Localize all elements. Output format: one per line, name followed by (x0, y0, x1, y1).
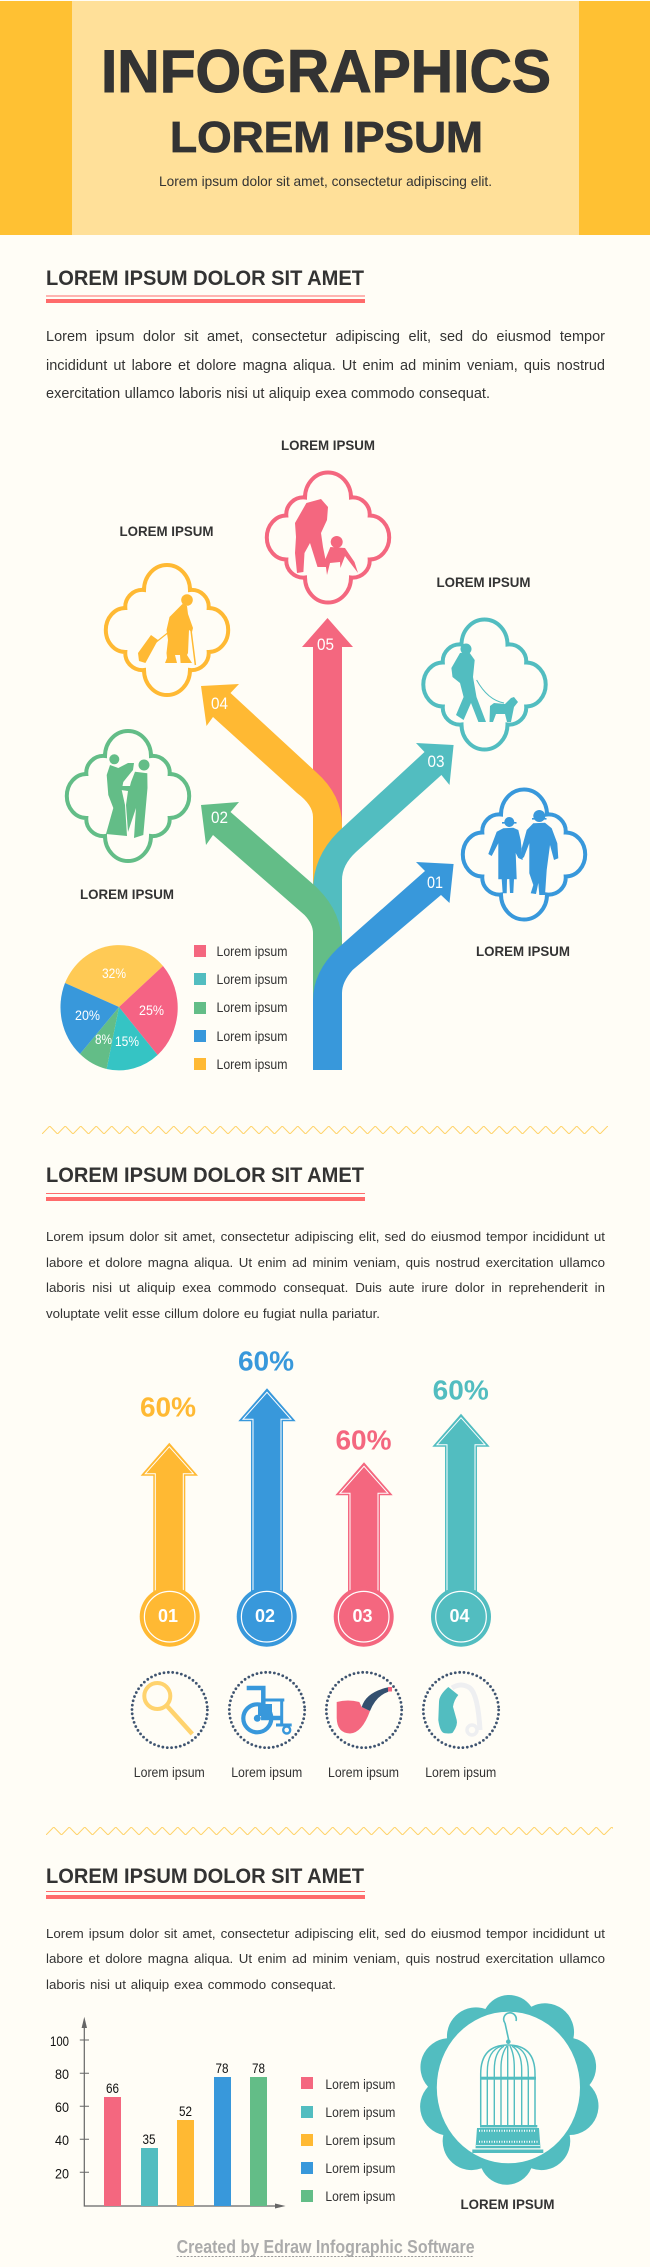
text block: section one paragraph: Lorem ipsum dolor sit amet, consectetur adipiscing elit, sed do eiusmod tempor (46, 329, 605, 345)
pie legend: Lorem ipsum (216, 944, 288, 959)
heading: section two (46, 1163, 365, 1201)
text block: section three paragraph (46, 1926, 605, 1992)
icon labels (134, 1765, 496, 1780)
arrow bar 04: 04 (449, 1606, 470, 1626)
bar chart legend: Lorem ipsum (325, 2077, 395, 2092)
panel: section three bar chart (46, 1864, 605, 2212)
arrow 03 (313, 743, 454, 950)
heading: section two: LOREM IPSUM DOLOR SIT AMET (46, 1163, 364, 1187)
arrow 01 (313, 862, 454, 1070)
icon labels: Lorem ipsum (134, 1765, 205, 1780)
arrow numbers: 01 (427, 873, 443, 892)
heading: section three: LOREM IPSUM DOLOR SIT AMET (46, 1864, 364, 1888)
icon: pink cloud with parent and child (267, 472, 389, 602)
arrow bar 01: 60% (140, 1392, 196, 1423)
pie legend: Lorem ipsum (216, 972, 288, 987)
pie legend: Lorem ipsum (216, 1000, 288, 1015)
bar chart: 20 (55, 2166, 69, 2182)
panel: header banner (0, 1, 650, 235)
bar chart: 52 (179, 2103, 192, 2119)
arrow 02 (201, 802, 342, 1010)
arrow 05 (302, 618, 353, 900)
pie chart: 20% (75, 1007, 100, 1023)
panel: section one tree infographic (46, 266, 605, 1072)
label: yellow cloud: LOREM IPSUM (120, 523, 214, 539)
text block: section three paragraph: labore et dolore magna aliqua. Ut enim ad minim veniam, quis nostrud exercitation ullamco (46, 1951, 605, 1966)
text block: section three paragraph: laboris nisi ut aliquip exea commodo consequat. (46, 1977, 336, 1992)
label: pink cloud: LOREM IPSUM (281, 437, 375, 453)
icon: teal cloud with man walking dog (423, 620, 546, 750)
icon: pipe (326, 1672, 402, 1748)
text block: section two paragraph: labore et dolore magna aliqua. Ut enim ad minim veniam, quis nostrud exercitation ullamco (46, 1255, 605, 1270)
pie chart: 8% (95, 1031, 112, 1047)
text block: section three paragraph: Lorem ipsum dolor sit amet, consectetur adipiscing elit, sed do eiusmod tempor incididunt ut (46, 1926, 605, 1941)
pie legend: Lorem ipsum (216, 1029, 288, 1044)
icon labels: Lorem ipsum (425, 1765, 496, 1780)
bar chart: 100 (50, 2033, 69, 2049)
arrow numbers: 02 (211, 808, 228, 827)
heading: section three (46, 1864, 365, 1899)
arrow bar 02 (237, 1346, 297, 1647)
bar chart (50, 2017, 286, 2208)
bar chart: 40 (55, 2132, 69, 2148)
pie chart: 15% (115, 1033, 139, 1049)
text block: section two paragraph: laboris nisi ut aliquip exea commodo consequat. Duis aute irure dolor in reprehenderit in (46, 1280, 605, 1295)
icon labels: Lorem ipsum (328, 1765, 399, 1780)
arrow bar 02: 60% (238, 1346, 294, 1377)
text block: section one paragraph: incididunt ut labore et dolore magna aliqua. Ut enim ad minim veniam, quis nostrud (46, 358, 605, 374)
icon: green cloud with couple (67, 731, 189, 861)
icon: yellow cloud with old woman (106, 565, 228, 695)
heading: section one: LOREM IPSUM DOLOR SIT AMET (46, 266, 364, 290)
label: birdcage: LOREM IPSUM (460, 2196, 554, 2212)
text block: section one paragraph (46, 329, 605, 402)
arrow bar 03: 03 (352, 1606, 373, 1626)
icon labels: Lorem ipsum (231, 1765, 302, 1780)
arrow bar 03: 60% (335, 1424, 392, 1455)
icon: magnifying glass (132, 1672, 207, 1748)
icon: scalloped frame with birdcage (420, 1995, 599, 2185)
bar chart legend: Lorem ipsum (325, 2105, 395, 2120)
bar chart legend: Lorem ipsum (325, 2189, 395, 2204)
pie chart: 25% (139, 1002, 164, 1018)
arrow numbers: 05 (317, 635, 334, 654)
arrow bar 03 (334, 1424, 394, 1647)
arrow numbers: 03 (428, 752, 444, 771)
bar chart: 80 (55, 2066, 69, 2082)
heading: section one (46, 266, 365, 303)
bar chart: 66 (106, 2080, 119, 2096)
label: teal cloud: LOREM IPSUM (436, 574, 530, 590)
icon: wheelchair (229, 1672, 305, 1748)
bar chart: 78 (252, 2060, 265, 2076)
label: blue cloud: LOREM IPSUM (476, 943, 570, 959)
text block: section two paragraph (46, 1229, 605, 1321)
icon: hearing aid (423, 1672, 499, 1748)
pie legend: Lorem ipsum (216, 1057, 288, 1072)
arrow 04 (201, 684, 342, 950)
arrow bar 01: 01 (158, 1606, 178, 1626)
bar chart: 78 (216, 2060, 229, 2076)
footer credit: Created by Edraw Infographic Software (177, 2237, 475, 2257)
bar chart: 60 (55, 2099, 69, 2115)
icon: blue cloud with elderly couple (463, 790, 585, 920)
arrow numbers: 04 (211, 694, 228, 713)
label: green cloud: LOREM IPSUM (80, 886, 174, 902)
bar chart legend (301, 2077, 395, 2204)
pie chart: 32% (102, 965, 126, 981)
bar chart legend: Lorem ipsum (325, 2161, 395, 2176)
bar chart: 35 (142, 2131, 156, 2147)
subtitle: LOREM IPSUM (170, 113, 483, 162)
arrow bar 02: 02 (255, 1606, 275, 1626)
title: INFOGRAPHICS (101, 38, 551, 105)
arrow bar 04 (431, 1374, 491, 1647)
text block: section two paragraph: voluptate velit esse cillum dolore eu fugiat nulla pariatur. (46, 1306, 380, 1321)
arrow numbers (211, 635, 444, 892)
tagline: Lorem ipsum dolor sit amet, consectetur adipiscing elit. (159, 173, 492, 189)
text block: section two paragraph: Lorem ipsum dolor sit amet, consectetur adipiscing elit, sed do eiusmod tempor incididunt ut (46, 1229, 605, 1244)
pie legend (194, 944, 288, 1072)
arrow bar 01 (140, 1392, 200, 1647)
pie chart (60, 945, 178, 1070)
bar chart legend: Lorem ipsum (325, 2133, 395, 2148)
panel: section two arrows (46, 1163, 605, 1780)
arrow bar 04: 60% (433, 1374, 489, 1405)
text block: section one paragraph: exercitation ullamco laboris nisi ut aliquip exea commodo consequat. (46, 386, 490, 402)
